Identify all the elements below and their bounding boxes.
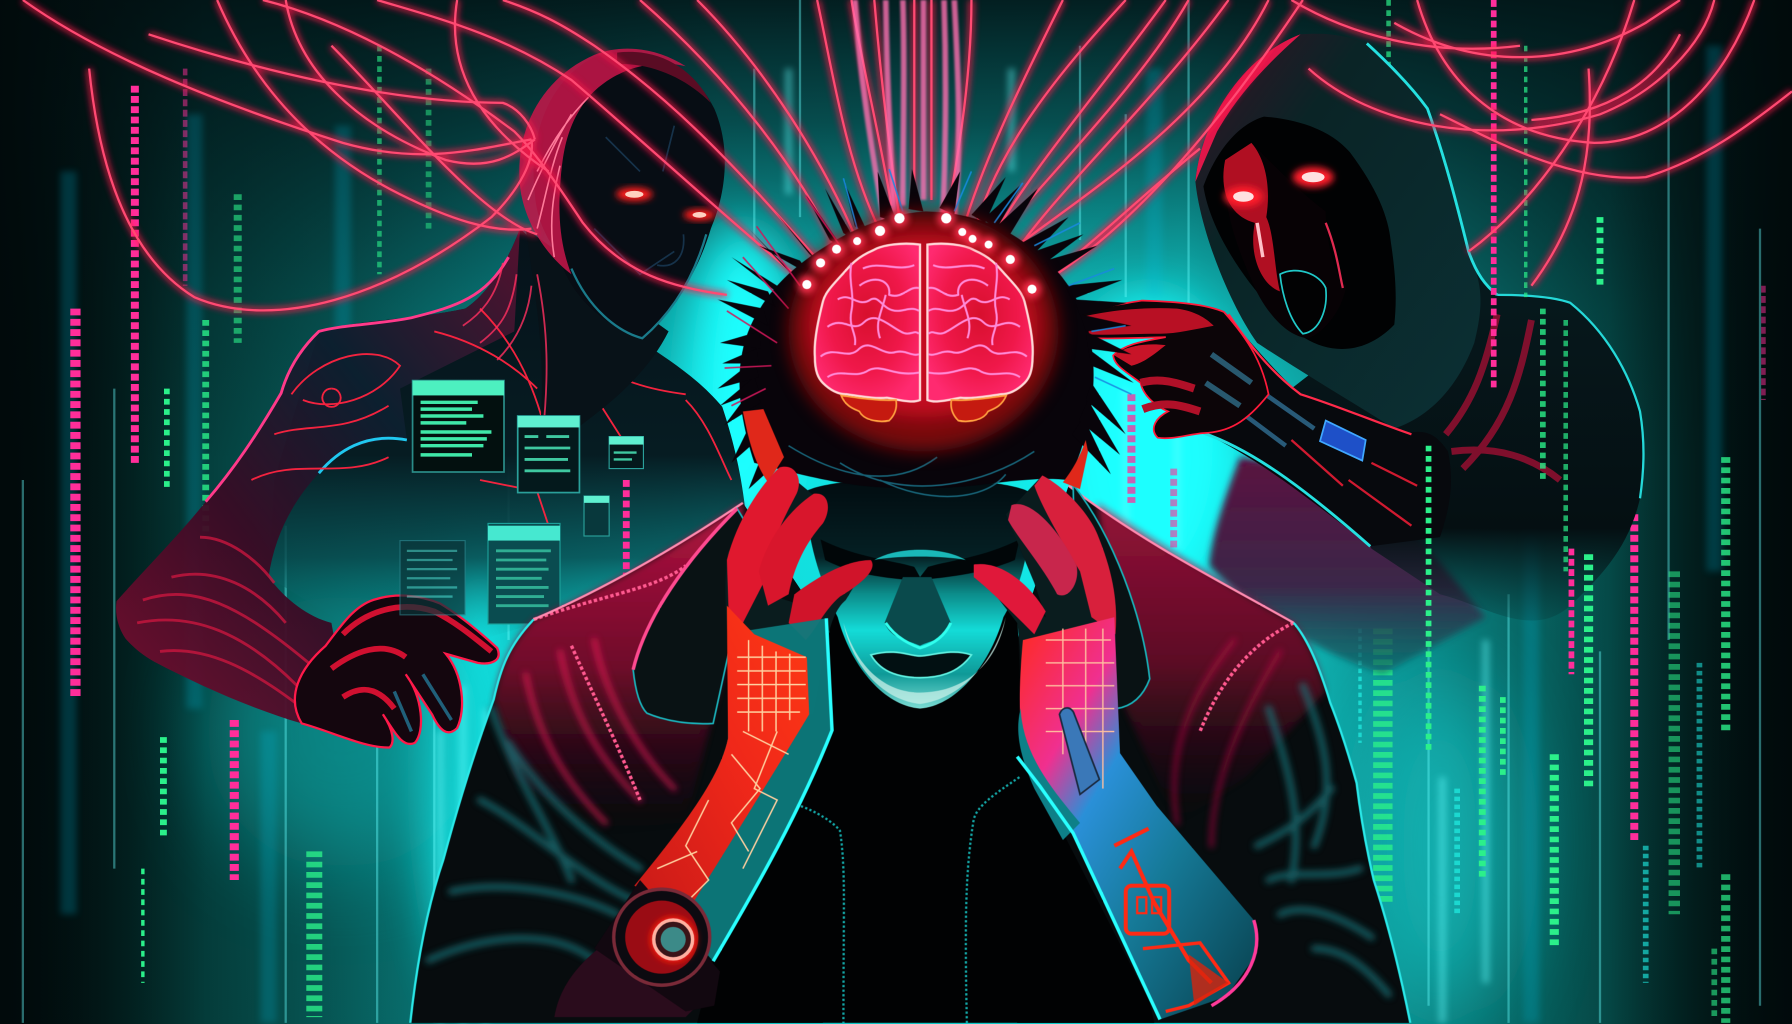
forearm [1203, 312, 1451, 546]
red circuit tattoos [251, 309, 731, 526]
arm [116, 229, 520, 723]
terminal window faint [400, 541, 465, 615]
left hand on head [725, 467, 873, 714]
centre man [410, 169, 1410, 1023]
head [534, 51, 725, 338]
right shoulder red highlight [1097, 503, 1326, 823]
dark halo around brain [789, 211, 1058, 451]
pink code strip [623, 480, 629, 583]
left figure: cyborg body [116, 49, 745, 747]
blue rod [1059, 708, 1099, 794]
ears [743, 409, 784, 482]
wrist device [594, 880, 720, 1011]
jacket [410, 485, 1410, 1023]
code columns over cloak [1429, 0, 1589, 789]
brain [809, 234, 1038, 421]
hair [718, 169, 1134, 496]
floating terminal windows [400, 381, 643, 624]
sleeve cuff [1211, 920, 1257, 1006]
teal skin [640, 618, 832, 961]
hand [295, 595, 499, 747]
eyes [616, 187, 715, 221]
cloak body [1291, 251, 1643, 621]
eyes [1224, 186, 1263, 207]
forearm muscle strands [137, 537, 309, 709]
right forearm with cybernetic plate [1017, 617, 1257, 1019]
seams [534, 566, 686, 800]
left shoulder red highlight [494, 503, 743, 834]
face [1223, 143, 1346, 338]
neck [526, 229, 669, 457]
right figure: hooded screaming cyborg [1050, 0, 1643, 789]
terminal window medium [518, 416, 579, 493]
hood opening [1203, 117, 1396, 349]
torso [269, 229, 745, 640]
wire glow layer [23, 0, 1792, 310]
face [806, 479, 1030, 709]
terminal window tiny [584, 496, 609, 536]
mouth and beard [871, 652, 971, 678]
nose [885, 577, 951, 646]
terminal window large [413, 381, 504, 472]
wire end nodes on scalp [798, 209, 1041, 298]
collars [633, 509, 754, 724]
left forearm with circuits [634, 606, 832, 961]
terminal window small [609, 437, 643, 469]
red circuit area [634, 606, 809, 914]
red circuit panel [1114, 829, 1229, 1011]
screaming mouth [1280, 271, 1326, 334]
terminal window lower [488, 523, 560, 624]
hood [1195, 34, 1481, 429]
right hand on head [974, 475, 1116, 714]
pointing hand [1050, 301, 1269, 438]
ghost lower torso [1209, 457, 1486, 674]
jacket folds [429, 640, 1389, 994]
cuff rib [554, 943, 709, 1017]
black shirt and hoodie [697, 606, 1154, 1023]
